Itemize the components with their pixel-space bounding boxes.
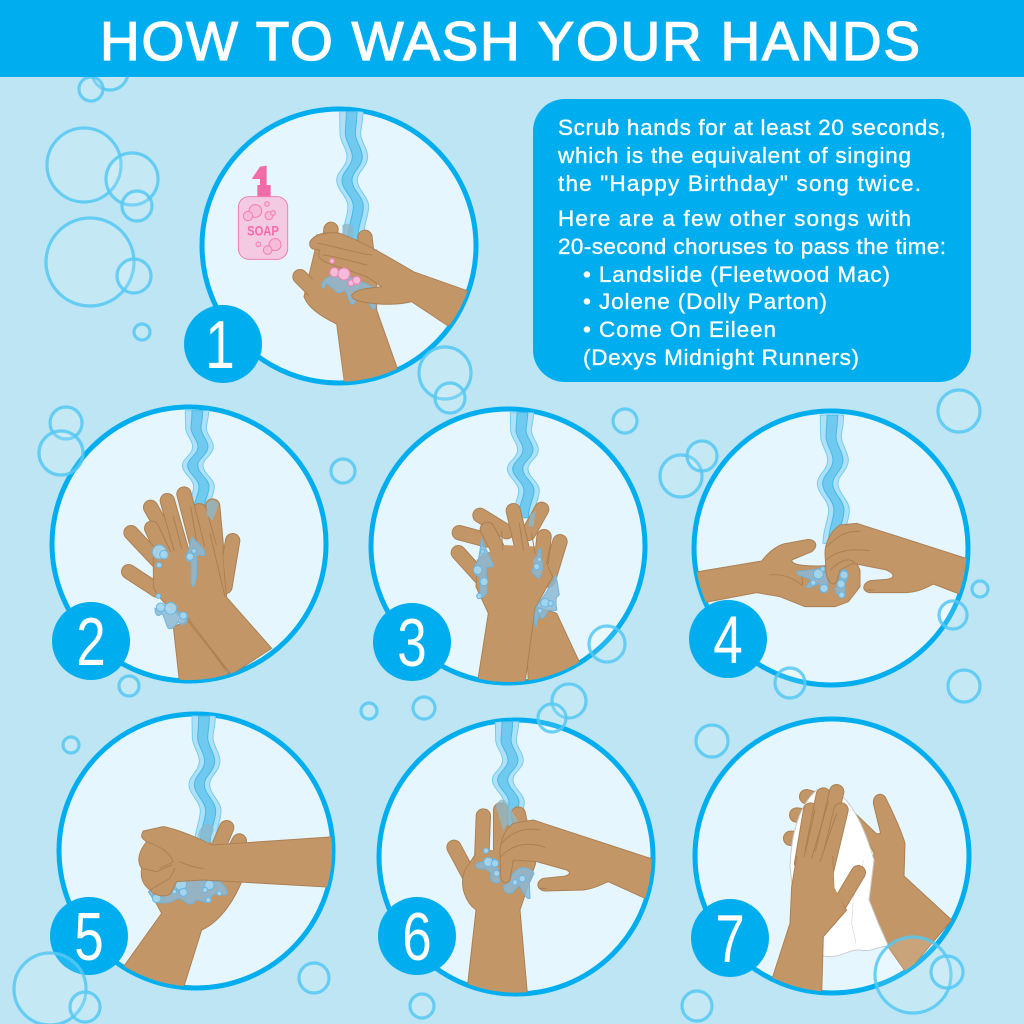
number badge 4: 4 — [713, 602, 743, 677]
step 3 illustration — [458, 413, 580, 683]
finger lines — [502, 523, 550, 563]
callout panel: scrub for 20 seconds and song list — [533, 99, 971, 382]
number badge 3 — [373, 603, 451, 681]
suds — [476, 848, 534, 898]
front hand fingers — [802, 792, 858, 903]
icon: soap pump bottle: SOAP — [247, 223, 279, 239]
lower arm — [173, 621, 229, 680]
callout panel: scrub for 20 seconds and song list: • Landslide (Fleetwood Mac) — [583, 262, 890, 287]
lower hand fingers — [215, 828, 239, 858]
number badge 2 — [52, 602, 130, 680]
right hand — [825, 523, 973, 599]
callout panel: scrub for 20 seconds and song list: (Dexys Midnight Runners) — [583, 345, 859, 370]
callout panel: scrub for 20 seconds and song list: • Jolene (Dolly Parton) — [583, 289, 827, 314]
number badge 6 — [378, 897, 456, 975]
suds — [797, 567, 848, 598]
fingers — [458, 509, 560, 580]
suds — [148, 880, 228, 905]
hand backs and forearm — [153, 547, 272, 675]
step 7 illustration — [772, 790, 952, 993]
suds — [473, 538, 559, 627]
callout panel: scrub for 20 seconds and song list: Here are a few other songs with — [558, 206, 911, 231]
lower palm and forearm — [463, 853, 536, 993]
callout panel: scrub for 20 seconds and song list: • Come On Eileen — [583, 317, 776, 342]
step 3: interlace fingers — [371, 409, 645, 683]
title banner — [0, 0, 1024, 77]
soap lather — [322, 275, 380, 309]
callout panel: scrub for 20 seconds and song list: 20-second choruses to pass the time: — [558, 234, 946, 259]
towel — [790, 790, 888, 957]
background bubbles behind header — [79, 54, 128, 101]
title banner: HOW TO WASH YOUR HANDS — [100, 10, 920, 72]
step 4: clean palm with fingertips — [690, 411, 973, 685]
step 4 illustration — [690, 415, 973, 607]
lower hand fingers and thumb — [454, 810, 527, 883]
finger lines — [173, 507, 230, 673]
step 6: rub fingertips on palm — [379, 720, 663, 994]
number badge 5: 5 — [74, 899, 104, 974]
finger creases — [317, 233, 372, 265]
number badge 5 — [50, 897, 128, 975]
step 1 illustration — [238, 112, 473, 387]
step 2 illustration — [129, 411, 272, 687]
left hand, palm up — [690, 539, 860, 607]
icon: soap pump bottle — [238, 166, 288, 259]
upper hand — [310, 233, 473, 330]
suds — [152, 537, 205, 629]
step 2: rub backs of hands — [52, 407, 326, 687]
number badge 6: 6 — [402, 899, 432, 974]
lower hand — [124, 881, 242, 986]
step 1: wet hands and apply soap — [202, 109, 476, 387]
number badge 1 — [184, 305, 262, 383]
number badge 7 — [691, 899, 769, 977]
upper hand — [500, 820, 652, 899]
front palm and forearm — [772, 857, 847, 993]
step 7: dry with a towel — [695, 719, 969, 993]
right hand — [853, 794, 952, 973]
number badge 1: 1 — [205, 307, 235, 382]
back arm — [527, 607, 580, 683]
pink soap bubbles — [330, 259, 361, 286]
step 6 illustration — [454, 722, 663, 993]
fingers and thumbs — [129, 494, 233, 590]
back hand fingers behind towel — [791, 797, 823, 838]
callout panel: scrub for 20 seconds and song list: which is the equivalent of singing — [557, 143, 911, 168]
upper hand — [139, 827, 340, 896]
number badge 3: 3 — [397, 605, 427, 680]
number badge 7: 7 — [715, 901, 745, 976]
callout panel: scrub for 20 seconds and song list: Scrub hands for at least 20 seconds, — [558, 115, 946, 140]
hand back and forearm — [476, 548, 553, 683]
step 5: scrub the thumb and wrist — [59, 714, 340, 988]
step 5 illustration — [120, 716, 340, 988]
lower hand — [300, 229, 400, 387]
callout panel: scrub for 20 seconds and song list: the "Happy Birthday" song twice. — [558, 171, 921, 196]
number badge 4 — [689, 600, 767, 678]
number badge 2: 2 — [76, 604, 106, 679]
